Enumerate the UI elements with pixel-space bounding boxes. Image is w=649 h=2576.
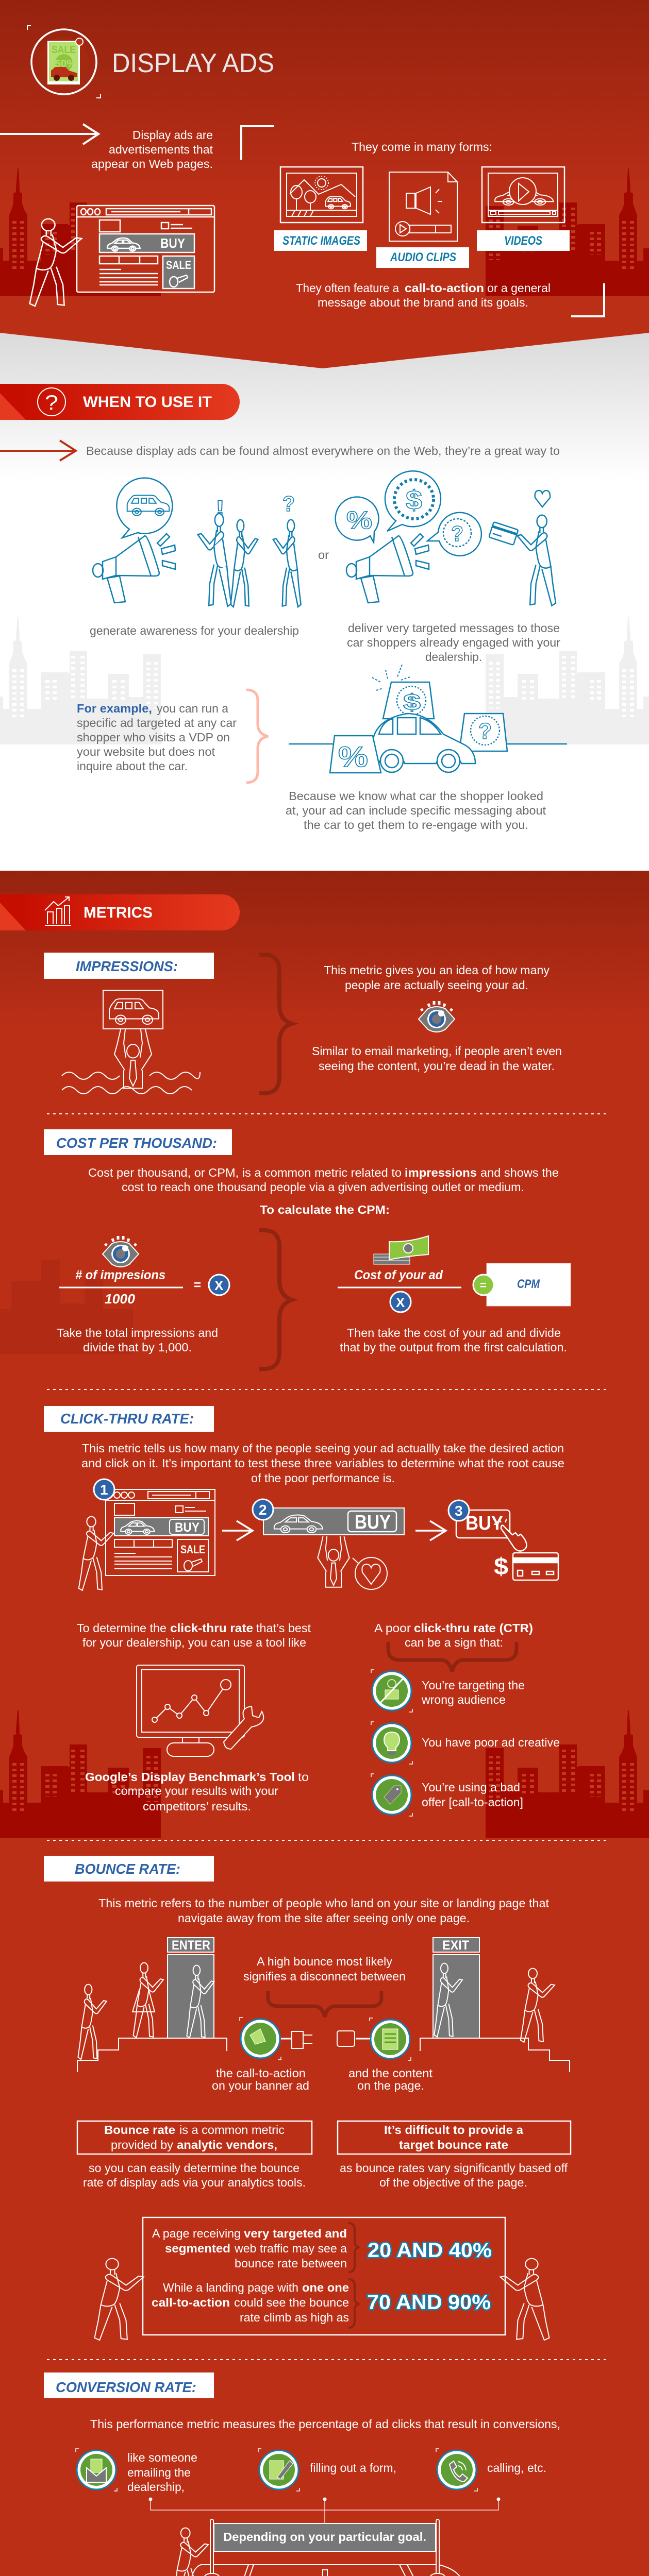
panel: static images: STATIC IMAGES	[282, 234, 360, 248]
icon: audio file	[389, 172, 457, 241]
illustration: step 3 click: BUY	[465, 1513, 503, 1534]
text: for example: shopper who visits a VDP on	[77, 731, 230, 744]
text: take the total: Take the total impressions and	[57, 1326, 218, 1340]
text: cpm intro: Cost per thousand, or CPM, is a common metric related to	[88, 1166, 402, 1179]
text: bad offer: offer [call-to-action]	[422, 1795, 523, 1809]
text: cpm intro: and shows the	[480, 1166, 559, 1179]
panel: audio clips: AUDIO CLIPS	[390, 250, 456, 264]
text: objective	[340, 2161, 568, 2189]
text: one cta	[152, 2281, 349, 2324]
illustration: person pushing right	[500, 2259, 550, 2340]
text: poor ctr: click-thru rate (CTR)	[414, 1621, 533, 1635]
text: determine ctr: for your dealership, you can use a tool like	[82, 1636, 306, 1649]
illustration: awareness: !	[215, 496, 225, 520]
badge: 1: 1	[100, 1482, 108, 1498]
illustration: step 2 banner	[263, 1508, 404, 1589]
brace: 20-40	[348, 2223, 359, 2272]
callout: analytic vendors: analytic vendors,	[177, 2138, 277, 2151]
icon: display ad badge: 50%	[55, 58, 76, 70]
text: cta label: the call-to-action	[216, 2066, 306, 2080]
text: ctr description: This metric tells us how many of the people seeing your ad actuallly take the desired action	[82, 1442, 564, 1455]
text: impressions description	[324, 963, 550, 992]
text: google tool: competitors’ results.	[143, 1800, 251, 1813]
text: bounce description: navigate away from the site after seeing only one page.	[178, 1911, 470, 1925]
brace: 70-90	[348, 2279, 359, 2328]
callout: target bounce rate: It’s difficult to provide a	[384, 2123, 523, 2137]
text: targeted traffic: segmented	[165, 2242, 230, 2255]
text: intro: appear on Web pages.	[91, 157, 213, 171]
text: bad offer	[422, 1781, 523, 1809]
panel: bounce rate	[44, 1856, 571, 2340]
banner: when to use it: WHEN TO USE IT	[83, 394, 212, 411]
formula: impressions over 1000: X	[214, 1278, 224, 1293]
text: targeted traffic: web traffic may see a	[234, 2242, 347, 2255]
icon: email	[76, 2449, 117, 2491]
panel: bounce benchmarks	[143, 2217, 505, 2335]
text: targeted traffic: A page receiving	[152, 2227, 241, 2240]
text: one cta: one one	[302, 2281, 349, 2294]
illustration: person drowning holding ad	[62, 990, 200, 1094]
badge: 2: 2	[259, 1502, 267, 1518]
banner: when to use it	[0, 384, 240, 420]
text: wrong audience: You’re targeting the	[422, 1679, 525, 1692]
callout: analytic vendors: Bounce rate	[104, 2123, 175, 2137]
text: content label: and the content	[348, 2066, 433, 2080]
text: call to action	[296, 281, 551, 309]
illustration: road sign: Depending on your particular goal.	[223, 2530, 426, 2544]
text: impressions description: people are actually seeing your ad.	[345, 978, 528, 992]
formula: cost over x equals cpm: X	[396, 1295, 405, 1310]
text: analytics tools	[83, 2161, 306, 2189]
panel: cost per thousand	[44, 1129, 571, 1369]
icon: bad offer	[371, 1774, 412, 1816]
text: impressions analogy: seeing the content, you’re dead in the water.	[319, 1059, 555, 1073]
stat: 70 and 90: 70 AND 90%	[367, 2291, 491, 2314]
text: deliver targeted: deliver very targeted messages to those	[348, 621, 560, 635]
text: phone: calling, etc.	[487, 2461, 546, 2475]
text: because we know: Because we know what car the shopper looked	[289, 789, 543, 803]
text: disconnect: signifies a disconnect between	[243, 1970, 406, 1983]
illustration: person pushing left	[94, 2259, 144, 2340]
text: generate awareness: generate awareness for your dealership	[90, 624, 299, 637]
text: email	[127, 2451, 197, 2494]
formula: impressions over 1000: 1000	[105, 1291, 136, 1307]
background: metrics	[0, 871, 649, 2576]
label: audio clips	[376, 247, 469, 268]
heading: cost per thousand	[44, 1129, 232, 1155]
text: for example: specific ad targeted at any car	[77, 716, 237, 730]
text: email: dealership,	[127, 2480, 185, 2494]
text: analytics tools: so you can easily determine the bounce	[89, 2161, 299, 2175]
text: intro: Display ads are	[132, 128, 213, 142]
text: because we know: the car to get them to re-engage with you.	[304, 818, 528, 832]
text: or: or	[318, 548, 329, 562]
icon: question: ?	[45, 392, 58, 414]
stat: 20 and 40: 20 AND 40%	[368, 2239, 492, 2262]
icon: video player	[482, 167, 564, 223]
text: targeted traffic: very targeted and	[244, 2227, 347, 2240]
illustration: browser with person: BUY	[160, 235, 185, 251]
text: determine ctr: To determine the	[77, 1621, 167, 1635]
text: impressions description: This metric gives you an idea of how many	[324, 963, 550, 977]
text: bounce description	[98, 1896, 550, 1925]
text: google tool: Google’s Display Benchmark’s Tool	[85, 1770, 295, 1784]
icon: question	[38, 388, 65, 416]
text: google tool	[85, 1770, 309, 1813]
panel: videos	[477, 167, 570, 251]
callout: target bounce rate: target bounce rate	[399, 2138, 508, 2151]
heading: bounce rate: BOUNCE RATE:	[75, 1861, 180, 1877]
brace: disconnect	[268, 1991, 381, 2017]
text: take the total	[57, 1326, 218, 1354]
illustration: road sign	[173, 2519, 464, 2576]
text: determine ctr: click-thru rate	[170, 1621, 253, 1635]
text: objective: as bounce rates vary significantly based off	[340, 2161, 568, 2175]
callout: target bounce rate	[338, 2121, 571, 2154]
text: because we know	[286, 789, 546, 832]
badge: 3: 3	[455, 1503, 463, 1519]
text: disconnect	[243, 1955, 406, 1983]
text: to calculate: To calculate the CPM:	[260, 1203, 390, 1216]
illustration: targeted messages	[336, 471, 556, 606]
formula: impressions over 1000: # of impresions	[75, 1268, 165, 1282]
text: targeted traffic: bounce rate between	[235, 2257, 347, 2270]
arrow: step 2 to 3	[415, 1521, 446, 1540]
text: because display ads: Because display ads can be found almost everywhere on the Web, they’re a great way to	[86, 444, 560, 457]
illustration: targeted messages: $	[406, 485, 422, 515]
text: wrong audience: wrong audience	[421, 1693, 506, 1706]
bracket: forms top	[241, 126, 274, 160]
illustration: browser with person: SALE	[166, 259, 191, 272]
skyline: when to use it	[0, 617, 649, 744]
text: cpm intro: cost to reach one thousand people via a given advertising outlet or medium.	[122, 1180, 524, 1194]
bracket: forms bottom	[571, 283, 604, 316]
text: call to action: call-to-action	[405, 281, 484, 295]
text: cta label: on your banner ad	[212, 2079, 309, 2092]
heading: bounce rate	[44, 1856, 214, 1882]
text: deliver targeted: dealership.	[425, 650, 482, 664]
badge: 1	[94, 1479, 114, 1500]
icon: wrong audience	[371, 1670, 412, 1712]
text: impressions analogy: Similar to email marketing, if people aren’t even	[312, 1044, 562, 1058]
formula: impressions over 1000	[59, 1236, 229, 1307]
text: for example	[77, 702, 237, 773]
text: ctr description: of the poor performance is.	[251, 1471, 395, 1485]
text: poor ctr: can be a sign that:	[405, 1636, 503, 1649]
formula: cost over x equals cpm: =	[480, 1279, 487, 1292]
brace: pink	[246, 690, 268, 783]
text: determine ctr	[77, 1621, 311, 1649]
illustration: step 1 browser: SALE	[180, 1543, 205, 1556]
text: many forms: They come in many forms:	[352, 140, 492, 154]
callout: analytic vendors: is a common metric	[179, 2123, 285, 2137]
text: because we know: at, your ad can include specific messaging about	[286, 804, 546, 817]
text: cta label	[212, 2066, 309, 2092]
arrow: when to use	[0, 440, 76, 461]
icon: poor creative	[371, 1722, 412, 1764]
brace: ctr horizontal	[388, 1642, 517, 1672]
illustration: exit door and stairs	[420, 1938, 570, 2072]
icon: cta plug	[240, 2018, 312, 2060]
illustration: car with signs	[289, 665, 567, 773]
icon: landscape image	[280, 167, 363, 223]
heading: click-thru rate: CLICK-THRU RATE:	[60, 1411, 194, 1427]
text: poor ctr: A poor	[374, 1621, 411, 1635]
illustration: enter door and stairs	[77, 1938, 227, 2072]
panel: conversion rate	[44, 2372, 568, 2576]
panel: static images	[274, 167, 367, 251]
text: determine ctr: that’s best	[256, 1621, 311, 1635]
icon: content plug	[337, 2018, 411, 2060]
text: conversion description: This performance metric measures the percentage of ad clicks that result in conversions,	[90, 2417, 560, 2431]
heading: click-thru rate	[44, 1406, 214, 1432]
callout: analytic vendors	[77, 2121, 312, 2154]
text: google tool: compare your results with your	[115, 1784, 278, 1798]
text: targeted traffic	[152, 2227, 347, 2270]
icon: phone	[436, 2449, 477, 2491]
text: deliver targeted	[347, 621, 560, 664]
formula: cost over x equals cpm	[338, 1236, 571, 1312]
illustration: awareness: ?	[282, 492, 295, 516]
text: for example: your website but does not	[77, 745, 215, 758]
text: then take the cost: that by the output from the first calculation.	[340, 1341, 567, 1354]
arrow: intro	[0, 124, 98, 144]
formula: cost over x equals cpm: Cost of your ad	[354, 1268, 443, 1282]
text: analytics tools: rate of display ads via your analytics tools.	[83, 2176, 306, 2189]
text: disconnect: A high bounce most likely	[257, 1955, 392, 1968]
skyline: cost per thousand	[0, 1260, 133, 1354]
text: then take the cost: Then take the cost of your ad and divide	[347, 1326, 561, 1340]
text: cpm intro	[88, 1166, 559, 1194]
text: wrong audience	[421, 1679, 525, 1706]
text: email: like someone	[127, 2451, 197, 2464]
text: bounce description: This metric refers to the number of people who land on your site or landing page that	[98, 1896, 550, 1910]
skyline: header	[0, 168, 649, 296]
background: header	[0, 0, 649, 371]
heading: display ads: DISPLAY ADS	[112, 48, 274, 78]
text: call to action: They often feature a	[296, 281, 399, 295]
illustration: targeted messages: ?	[451, 521, 463, 546]
text: ctr description: and click on it. It’s important to test these three variables to determine what the root cause	[81, 1456, 564, 1470]
icon: display ad badge: SALE	[52, 44, 76, 56]
icon: display ad badge	[27, 26, 101, 98]
icon: chart	[45, 897, 71, 925]
text: impressions analogy	[312, 1044, 562, 1073]
banner: metrics	[0, 894, 240, 930]
callout: analytic vendors: provided by	[111, 2138, 173, 2151]
text: one cta: call-to-action	[152, 2296, 230, 2309]
arrow: step 1 to 2	[222, 1521, 253, 1540]
brace: cpm	[259, 1230, 292, 1369]
text: take the total: divide that by 1,000.	[83, 1341, 192, 1354]
panel: videos: VIDEOS	[504, 234, 542, 248]
text: content label: on the page.	[357, 2079, 424, 2092]
illustration: awareness	[93, 478, 301, 607]
formula: impressions over 1000: =	[194, 1278, 201, 1292]
text: bad offer: You’re using a bad	[422, 1781, 520, 1794]
panel: audio clips	[376, 172, 469, 268]
text: call to action: message about the brand and its goals.	[318, 296, 528, 309]
background: when to use it	[0, 333, 649, 871]
text: one cta: could see the bounce	[234, 2296, 349, 2309]
illustration: car with signs: ?	[478, 719, 492, 744]
text: for example: inquire about the car.	[77, 759, 188, 773]
heading: conversion rate	[44, 2372, 214, 2398]
heading: impressions	[44, 953, 214, 979]
panel: impressions	[44, 953, 562, 1094]
heading: conversion rate: CONVERSION RATE:	[56, 2379, 196, 2395]
badge: 3	[448, 1500, 469, 1521]
illustration: exit door and stairs: EXIT	[442, 1938, 469, 1953]
connector: goal	[148, 2498, 500, 2523]
label: static images	[274, 230, 367, 251]
text: ctr description	[81, 1442, 564, 1485]
text: content label	[348, 2066, 433, 2092]
badge: 2	[253, 1499, 273, 1520]
banner: metrics: METRICS	[84, 904, 153, 921]
skyline: click-thru	[0, 1710, 649, 1838]
illustration: step 3 click: $	[494, 1553, 508, 1580]
illustration: step 1 browser: BUY	[175, 1520, 199, 1535]
label: videos	[477, 230, 570, 251]
text: for example: For example,	[77, 702, 152, 715]
header: title	[27, 26, 274, 98]
illustration: browser with person	[30, 206, 214, 306]
text: one cta: While a landing page with	[163, 2281, 298, 2294]
heading: impressions: IMPRESSIONS:	[76, 958, 178, 974]
text: poor creative: You have poor ad creative	[422, 1736, 560, 1749]
heading: cost per thousand: COST PER THOUSAND:	[56, 1135, 217, 1151]
text: call to action: or a general	[487, 281, 551, 295]
text: form: filling out a form,	[310, 2461, 396, 2475]
brace: impressions	[259, 955, 292, 1093]
illustration: car with signs: $	[403, 690, 421, 715]
formula: cost over x equals cpm: CPM	[517, 1277, 540, 1291]
text: for example: you can run a	[157, 702, 228, 715]
icon: eye	[419, 1001, 455, 1032]
text: google tool: to	[298, 1770, 309, 1784]
text: one cta: rate climb as high as	[240, 2311, 349, 2324]
text: deliver targeted: car shoppers already engaged with your	[347, 636, 560, 649]
panel: click-thru rate	[44, 1406, 564, 1816]
icon: form	[258, 2449, 299, 2491]
illustration: step 1 browser	[79, 1489, 215, 1590]
text: intro: advertisements that	[109, 143, 213, 156]
text: email: emailing the	[127, 2466, 191, 2479]
illustration: car with signs: %	[338, 740, 368, 773]
text: cpm intro: impressions	[405, 1166, 477, 1179]
illustration: targeted messages: %	[346, 507, 372, 534]
illustration: step 2 banner: BUY	[355, 1512, 391, 1533]
text: objective: of the objective of the page.	[379, 2176, 527, 2189]
text: poor ctr	[374, 1621, 533, 1649]
illustration: enter door and stairs: ENTER	[172, 1938, 210, 1953]
icon: monitor with wrench	[137, 1665, 263, 1756]
text: intro	[91, 128, 213, 171]
illustration: step 3 click	[456, 1510, 558, 1580]
text: then take the cost	[340, 1326, 567, 1354]
